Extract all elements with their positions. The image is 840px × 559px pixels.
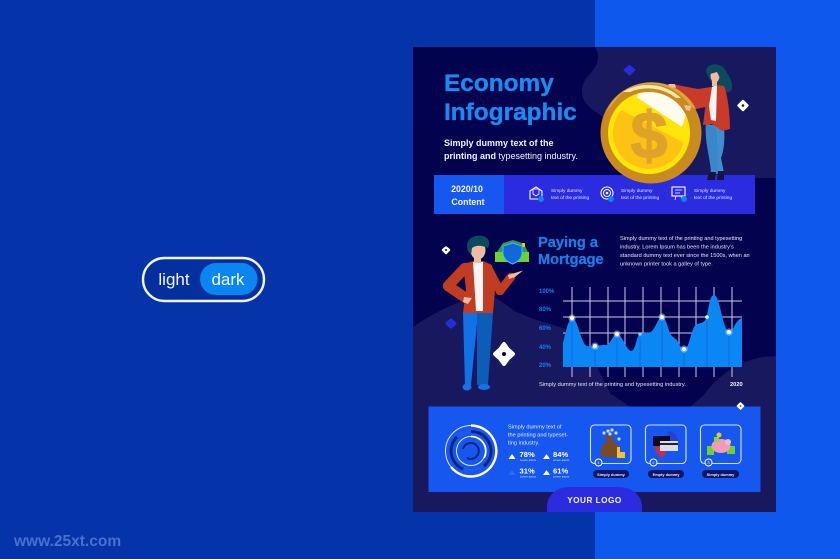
heading: paying a mortgage: Paying a (538, 235, 599, 251)
toggle: light / dark: dark (211, 270, 245, 289)
hands (508, 270, 523, 279)
illustration: gold coin (600, 82, 702, 184)
radial chart (446, 426, 496, 476)
stat 84% (543, 450, 570, 462)
icon: sparkle blue top (624, 66, 634, 74)
y axis labels: 20% (539, 363, 552, 369)
jacket body (463, 261, 495, 313)
illustration: woman's hands (668, 84, 691, 111)
banner: Content (451, 197, 485, 207)
y axis labels: 60% (539, 326, 552, 332)
blob: bottom band (413, 395, 776, 512)
stat 61% (543, 466, 570, 478)
y axis labels: 40% (539, 345, 552, 351)
dollar sign: $ (631, 98, 667, 172)
text block: mortgage description: standard dummy text ever since the 1500s, when an (620, 253, 750, 259)
watermark: www.25xt.com (13, 533, 121, 550)
text block: stats description: Simply dummy text of (508, 424, 562, 430)
logo tab: YOUR LOGO (567, 496, 622, 505)
text block: mortgage description: unknown printer took a galley of type. (620, 262, 713, 268)
horizontal grid (563, 301, 742, 333)
poster (413, 47, 776, 512)
text block: stats description (508, 424, 568, 446)
shirt (709, 85, 717, 121)
card 3: piggy bank: 3 (707, 460, 710, 465)
toggle: light / dark: light (158, 270, 190, 289)
illustration: man (448, 236, 523, 390)
pants (463, 313, 478, 385)
card 1: money bag: Simply dummy (597, 472, 626, 477)
panel: bottom stats (428, 406, 760, 492)
text block: mortgage description: industry. Lorem Ipsum has been the industry's (620, 244, 734, 250)
subtitle (444, 138, 578, 161)
icon: sparkle white large (495, 344, 513, 364)
stat 31% (508, 466, 537, 478)
blob: chart corner (704, 356, 776, 395)
poster background (413, 47, 776, 395)
stat 84%: Lorem ipsum (553, 458, 570, 462)
icon: shield with cash (495, 240, 529, 264)
area (563, 295, 742, 367)
background: right panel (595, 0, 840, 559)
lines over area (572, 321, 729, 367)
banner item 2: text of the printing (621, 195, 659, 201)
heading: paying a mortgage (538, 235, 604, 268)
heading: paying a mortgage: Mortgage (538, 252, 604, 268)
banner item 1 (530, 187, 589, 202)
card 1: money bag (590, 425, 631, 478)
icon: sparkle white small (442, 247, 450, 254)
data points (570, 315, 731, 351)
hair (706, 64, 732, 93)
stat 31%: 31% (520, 466, 535, 476)
title (444, 70, 577, 126)
icon: sparkle blue left (446, 320, 456, 328)
jacket arms (448, 268, 466, 298)
blob: top right (582, 47, 776, 178)
coin shade (613, 110, 684, 169)
title: Economy (444, 70, 554, 97)
banner item 2: Simply dummy (621, 188, 653, 194)
background: left panel (0, 0, 595, 559)
y axis labels: 80% (539, 307, 552, 313)
data point halos (568, 313, 733, 353)
stat 61%: Lorem ipsum (553, 474, 570, 478)
vertical grid (572, 287, 732, 377)
card 2: credit cards: 2 (652, 460, 655, 465)
banner item 3 (672, 187, 732, 202)
jacket with arms (672, 84, 730, 131)
text block: stats description: ting industry. (508, 440, 540, 446)
banner (434, 175, 755, 214)
y axis labels (539, 289, 555, 369)
jeans (706, 124, 724, 174)
banner: 2020/10 (451, 184, 483, 194)
face (710, 72, 720, 82)
stat 84%: 84% (553, 450, 568, 459)
stat 31%: Lorem ipsum (520, 474, 537, 478)
text block: stats description: the printing and typeset- (508, 432, 568, 438)
area chart (539, 287, 742, 377)
text block: mortgage description: Simply dummy text of the printing and typesetting (620, 236, 742, 242)
text block: mortgage description (620, 236, 750, 268)
stat 78%: Lorem ipsum (520, 458, 537, 462)
stat 78%: 78% (520, 450, 535, 459)
head (471, 246, 486, 259)
banner item 2 (601, 187, 659, 202)
banner item 1: text of the printing (551, 195, 589, 201)
card 3: piggy bank (700, 425, 741, 478)
stat 78% (508, 450, 537, 462)
boots (707, 172, 716, 180)
card 2: credit cards (646, 425, 686, 478)
subtitle: Simply dummy text of the (444, 138, 554, 148)
toggle: light / dark (143, 258, 264, 301)
banner item 1: Simply dummy (551, 188, 583, 194)
blob: mid hill (413, 295, 614, 400)
coin highlight (637, 92, 686, 127)
card 2: credit cards: Empty dummy (653, 472, 680, 477)
stat 61%: 61% (553, 466, 568, 476)
card 1: money bag: 1 (597, 460, 600, 465)
chart caption: Simply dummy text of the printing and typesetting industry. (539, 382, 686, 388)
subtitle: printing and typesetting industry. (444, 151, 578, 161)
card 3: piggy bank: Simply dummy (707, 472, 735, 477)
logo tab (547, 487, 642, 512)
y axis labels: 100% (539, 289, 555, 295)
illustration: woman (672, 64, 732, 180)
icon: sparkle white top (738, 101, 748, 110)
banner item 3: text of the printing (694, 195, 732, 201)
banner item 3: Simply dummy (694, 188, 726, 194)
shirt (473, 262, 483, 311)
title: Infographic (444, 99, 577, 126)
chart year: 2020 (730, 382, 743, 388)
icon: sparkle white bottom (738, 403, 744, 409)
